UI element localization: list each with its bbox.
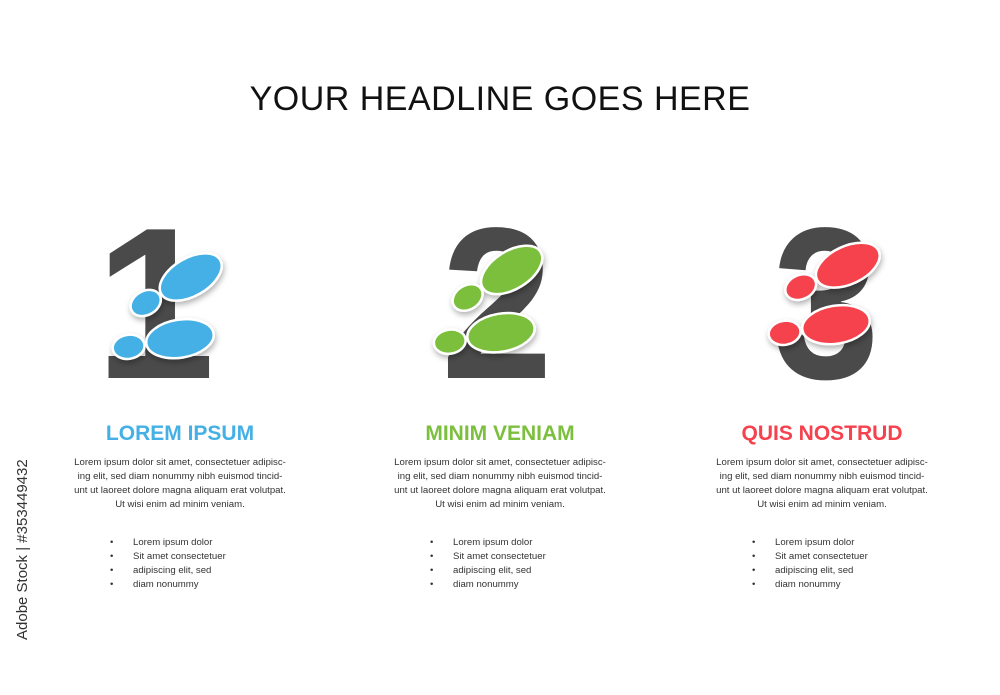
bullets 2 [430, 537, 546, 590]
text 1: ing elit, sed diam nonummy nibh euismod tincid- [78, 471, 282, 482]
heading 3: QUIS NOSTRUD [741, 422, 902, 445]
text 3: Lorem ipsum dolor sit amet, consectetuer adipisc- [716, 457, 928, 468]
text 1: Ut wisi enim ad minim veniam. [115, 499, 245, 510]
side caption: Adobe Stock | #353449432 [14, 459, 31, 640]
text 3: ing elit, sed diam nonummy nibh euismod tincid- [720, 471, 924, 482]
heading 2: MINIM VENIAM [425, 422, 575, 445]
bullets 2: adipiscing elit, sed [453, 565, 531, 576]
text 1: unt ut laoreet dolore magna aliquam erat volutpat. [74, 485, 286, 496]
text 2: ing elit, sed diam nonummy nibh euismod tincid- [398, 471, 602, 482]
bullets 3 [752, 537, 868, 590]
text 2: Lorem ipsum dolor sit amet, consectetuer adipisc- [394, 457, 606, 468]
text 3: Ut wisi enim ad minim veniam. [757, 499, 887, 510]
text 3: unt ut laoreet dolore magna aliquam erat volutpat. [716, 485, 928, 496]
bullets 1: diam nonummy [133, 579, 199, 590]
bullets 3: Sit amet consectetuer [775, 551, 868, 562]
bullets 3: diam nonummy [775, 579, 841, 590]
digit 3 with red footprints: 3 [772, 182, 880, 424]
bullets 2: diam nonummy [453, 579, 519, 590]
bullets 1: Lorem ipsum dolor [133, 537, 212, 548]
digit 2 with green footprints: 2 [441, 182, 553, 424]
column 2 [394, 422, 606, 590]
bullets 3: adipiscing elit, sed [775, 565, 853, 576]
column 1 [74, 422, 286, 590]
bullets 2: Sit amet consectetuer [453, 551, 546, 562]
bullets 1: Sit amet consectetuer [133, 551, 226, 562]
text 1 [74, 457, 286, 510]
column 3 [716, 422, 928, 590]
text 1: Lorem ipsum dolor sit amet, consectetuer adipisc- [74, 457, 286, 468]
bullets 1 [110, 537, 226, 590]
digit 1 with blue footprints: 1 [95, 182, 215, 424]
title: YOUR HEADLINE GOES HERE [250, 80, 750, 118]
text 2: Ut wisi enim ad minim veniam. [435, 499, 565, 510]
bullets 3: Lorem ipsum dolor [775, 537, 854, 548]
text 2 [394, 457, 606, 510]
bullets 2: Lorem ipsum dolor [453, 537, 532, 548]
bullets 1: adipiscing elit, sed [133, 565, 211, 576]
heading 1: LOREM IPSUM [106, 422, 254, 445]
text 2: unt ut laoreet dolore magna aliquam erat volutpat. [394, 485, 606, 496]
text 3 [716, 457, 928, 510]
